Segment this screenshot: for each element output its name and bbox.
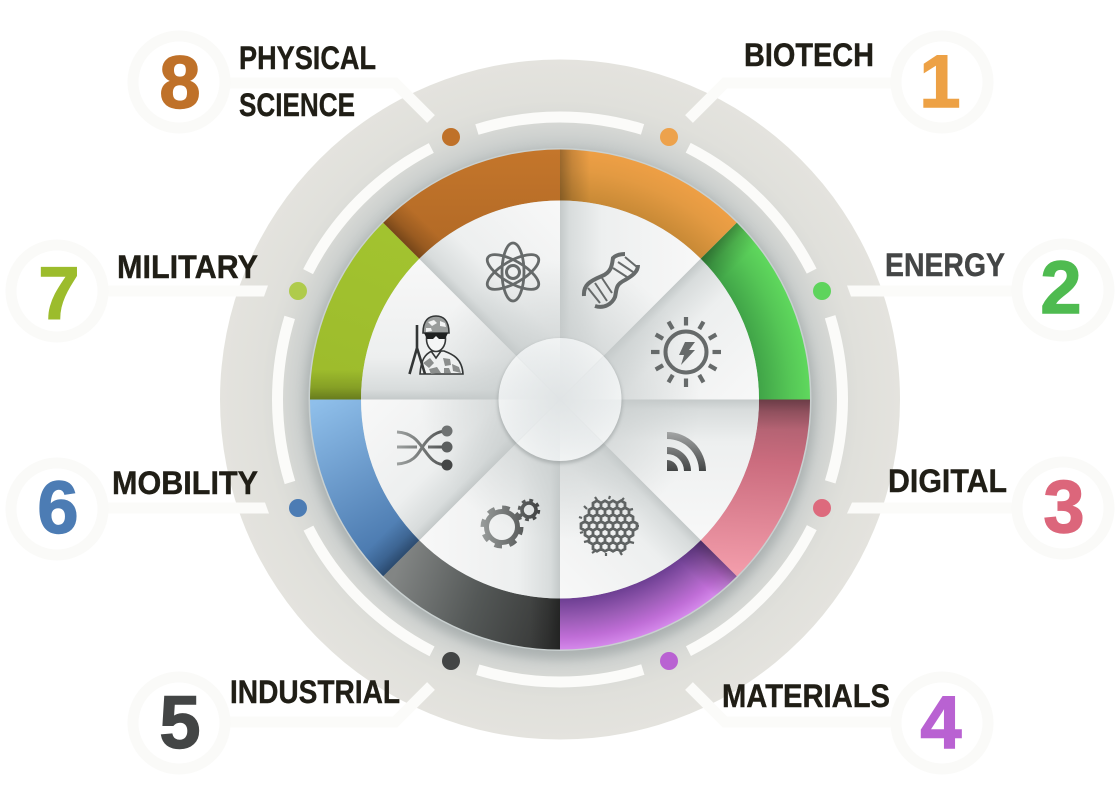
coloured marker dots [289, 128, 831, 670]
number 3: 3 [1043, 465, 1085, 548]
number 1: 1 [919, 40, 961, 123]
number 4: 4 [920, 681, 962, 764]
label: physical science [239, 40, 376, 123]
label: digital: DIGITAL [888, 463, 1007, 499]
connector lines [105, 83, 1015, 722]
number 8: 8 [159, 41, 201, 124]
coloured segment ring [308, 148, 812, 651]
label: military: MILITARY [117, 249, 258, 285]
icon: sun with lightning bolt [651, 317, 721, 387]
icon: crossing network [397, 426, 452, 470]
label: materials: MATERIALS [722, 678, 890, 714]
label: energy: ENERGY [885, 247, 1005, 283]
icon: wifi signal [667, 432, 706, 471]
number 2: 2 [1040, 246, 1082, 329]
icon: soldier [410, 316, 463, 374]
icon: graphene lattice [579, 496, 639, 556]
icon: DNA helix [584, 254, 638, 307]
label: physical science: SCIENCE [239, 87, 355, 123]
number 7: 7 [38, 252, 80, 335]
label: industrial: INDUSTRIAL [230, 674, 400, 710]
label: mobility: MOBILITY [112, 465, 258, 501]
inner folded disk [320, 159, 800, 640]
number 6: 6 [37, 466, 79, 549]
label: biotech: BIOTECH [744, 37, 874, 73]
centre hub [486, 325, 634, 474]
icon: gears [483, 500, 538, 546]
ring inner shadow [306, 151, 814, 659]
label: physical science: PHYSICAL [239, 40, 376, 76]
icon: atom [482, 243, 544, 301]
outer grey ring [220, 60, 900, 740]
white dashed track [207, 47, 913, 752]
number 5: 5 [159, 681, 201, 764]
